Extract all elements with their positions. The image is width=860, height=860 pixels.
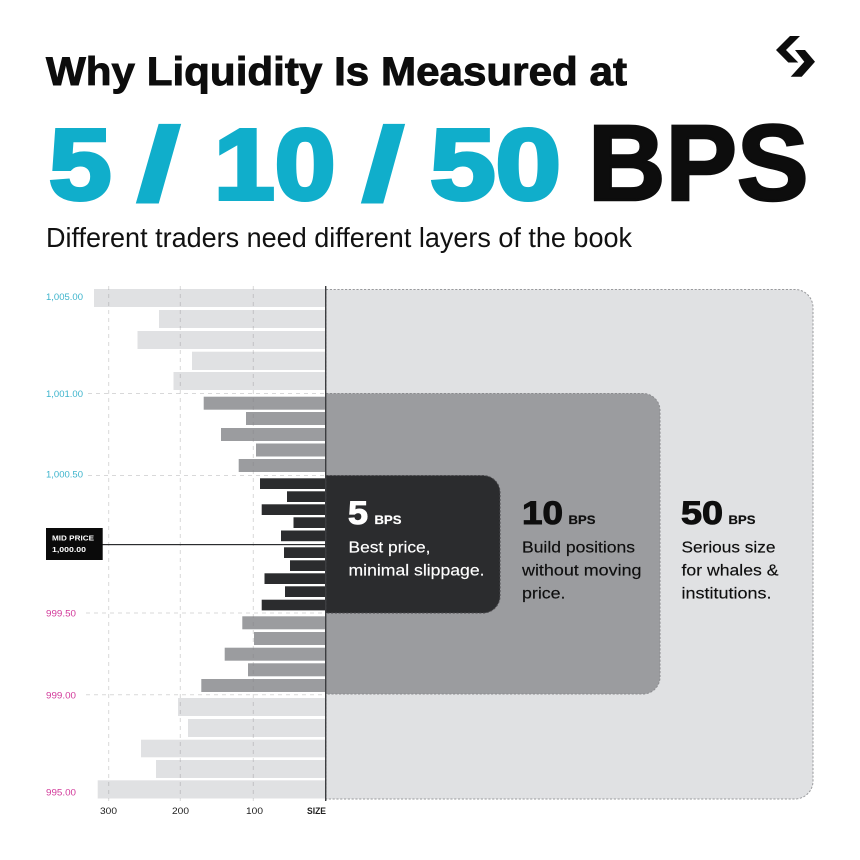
ask price labels: 1,000.50 — [46, 470, 83, 480]
order book bars — [94, 289, 325, 798]
size axis labels: 300 — [100, 806, 117, 816]
bid price labels: 999.00 — [46, 690, 76, 700]
10 BPS heading: BPS — [568, 513, 596, 527]
text: 5 BPS — [348, 495, 484, 580]
headline numbers: 50 — [430, 109, 561, 221]
10 BPS description — [521, 540, 642, 603]
panel: 10 BPS zone — [326, 394, 660, 694]
50 BPS description: Serious size — [682, 540, 776, 557]
mid price text: 1,000.00 — [52, 545, 86, 554]
10 BPS heading: 10 — [522, 495, 563, 531]
10 BPS description: price. — [522, 586, 566, 603]
5 BPS description: Best price, — [348, 540, 430, 557]
size axis labels: 100 — [246, 806, 263, 816]
headline numbers: / — [137, 107, 180, 222]
bars: near-mid levels — [260, 478, 325, 610]
10 BPS description: without moving — [521, 563, 642, 580]
bars: middle asks — [204, 397, 325, 472]
size axis labels: SIZE — [307, 806, 326, 816]
bars: outer asks — [94, 289, 325, 390]
headline: 5 / 10 / 50 BPS — [49, 102, 808, 223]
5 BPS heading — [348, 495, 402, 531]
headline numbers: 5 — [49, 109, 111, 221]
50 BPS description: for whales & — [682, 563, 779, 580]
panel: 5 BPS zone — [326, 476, 500, 613]
title: Why Liquidity Is Measured at — [46, 50, 627, 94]
panel: 50 BPS zone — [326, 290, 813, 799]
5 BPS description — [348, 540, 484, 580]
ask price labels: 1,001.00 — [46, 389, 83, 399]
text: 10 BPS — [521, 495, 642, 603]
size axis labels — [100, 806, 326, 816]
size axis labels: 200 — [172, 806, 189, 816]
ask price labels: 1,005.00 — [46, 292, 83, 302]
headline numbers: 10 — [214, 109, 336, 221]
text: 50 BPS — [681, 495, 779, 603]
mid price text: MID PRICE — [52, 534, 94, 542]
subtitle: Different traders need different layers of the book — [46, 222, 632, 253]
bars: outer bids — [98, 698, 325, 798]
headline numbers: / — [362, 107, 404, 222]
mid price marker — [46, 528, 326, 560]
bars: middle bids — [201, 616, 325, 692]
ask price labels — [46, 292, 83, 480]
mid price text — [52, 534, 94, 554]
bid price labels — [46, 608, 76, 798]
10 BPS description: Build positions — [522, 540, 635, 557]
5 BPS description: minimal slippage. — [348, 563, 484, 580]
icon: brand logo — [776, 36, 815, 77]
headline unit: BPS — [588, 102, 808, 223]
size axis line — [325, 286, 326, 801]
mid price tag — [46, 528, 103, 560]
headline numbers — [49, 107, 561, 222]
5 BPS heading: BPS — [374, 513, 402, 527]
bid price labels: 999.50 — [46, 608, 76, 618]
50 BPS heading: BPS — [728, 513, 756, 527]
mid price line — [102, 544, 326, 545]
bid price labels: 995.00 — [46, 788, 76, 798]
50 BPS heading: 50 — [681, 495, 723, 531]
50 BPS heading — [681, 495, 756, 531]
10 BPS heading — [522, 495, 596, 531]
50 BPS description — [682, 540, 779, 603]
50 BPS description: institutions. — [682, 586, 772, 603]
5 BPS heading: 5 — [348, 495, 368, 531]
